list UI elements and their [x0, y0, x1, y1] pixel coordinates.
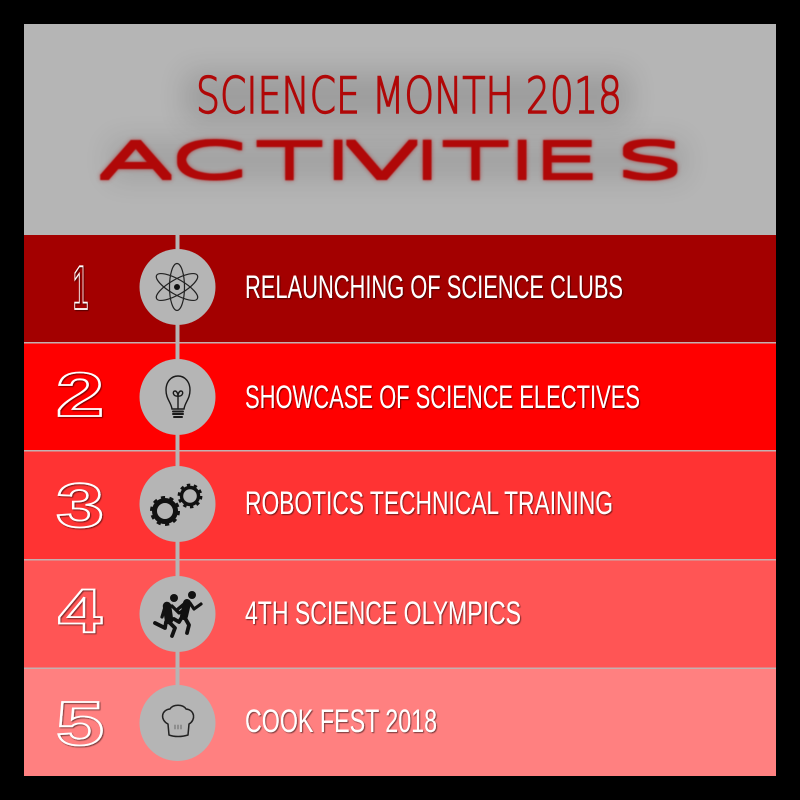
- icon: light bulb: [140, 359, 216, 435]
- icon: atom: [140, 249, 216, 325]
- text: 1: [73, 254, 88, 323]
- heading: science month 2018: SCIENCE MONTH 2018: [196, 67, 622, 125]
- panel: row 1 background: [24, 235, 776, 342]
- icon: chef hat: [140, 685, 216, 761]
- label: robotics technical training: ROBOTICS TECHNICAL TRAINING: [245, 485, 613, 521]
- heading: activities: ACTIVITIES: [98, 134, 685, 189]
- panel: row 4 background: [24, 560, 776, 668]
- numeral 5: 5: [56, 690, 104, 759]
- numeral 2: 2: [56, 361, 104, 430]
- icon: runners: [140, 576, 216, 652]
- panel: row 2 background: [24, 343, 776, 450]
- header panel: [24, 24, 776, 235]
- icon: gears: [140, 466, 216, 542]
- panel: row 3 background: [24, 451, 776, 559]
- numeral 3: 3: [56, 472, 104, 541]
- label: 4th science olympics: 4TH SCIENCE OLYMPICS: [245, 595, 521, 631]
- label: relaunching of science clubs: RELAUNCHING OF SCIENCE CLUBS: [245, 269, 623, 305]
- numeral 4: 4: [58, 577, 103, 646]
- panel: row 5 background: [24, 669, 776, 776]
- timeline connector: [176, 235, 180, 705]
- label: cook fest 2018: COOK FEST 2018: [245, 703, 437, 739]
